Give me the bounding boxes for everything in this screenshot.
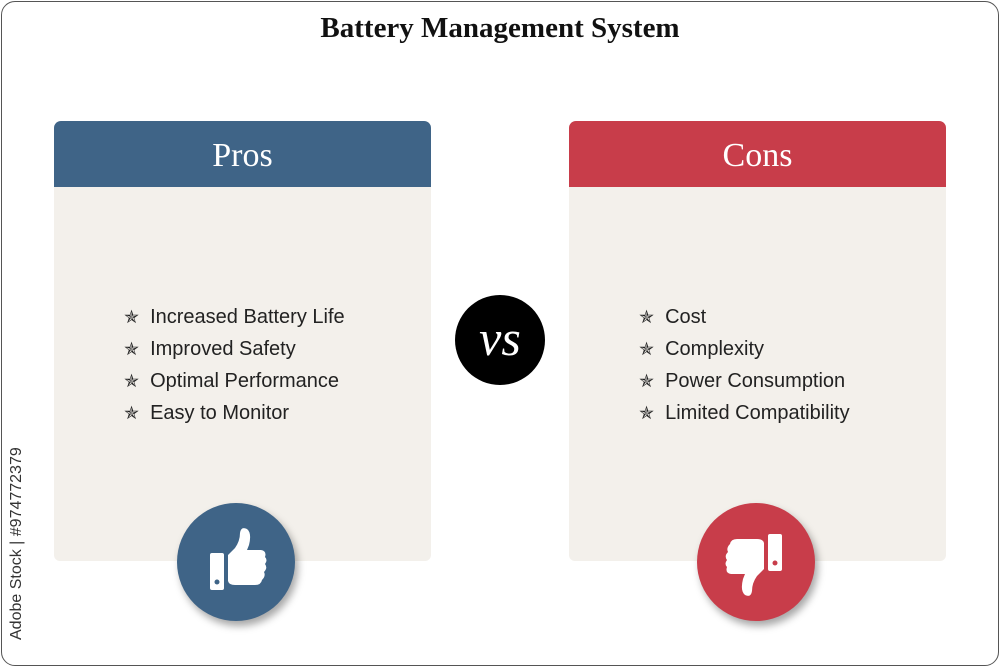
cons list: ✯ Cost	[639, 306, 706, 328]
panel: cons	[569, 121, 946, 631]
vs badge: vs	[479, 310, 521, 366]
cons list: ✯ Limited Compatibility	[639, 402, 850, 424]
pros list: ✯ Optimal Performance	[124, 370, 339, 392]
pros list: ✯ Improved Safety	[124, 338, 296, 360]
title: Battery Management System	[320, 12, 680, 44]
cons header	[569, 121, 946, 187]
cons header: Cons	[723, 137, 792, 174]
cons list: ✯ Complexity	[639, 338, 764, 360]
pros list: ✯ Increased Battery Life	[124, 306, 345, 328]
pros header	[54, 121, 431, 187]
pros list: ✯ Easy to Monitor	[124, 402, 289, 424]
pros header: Pros	[212, 137, 273, 174]
vs badge	[455, 295, 545, 385]
icon: thumbs down	[697, 503, 815, 621]
pros body	[54, 187, 431, 561]
icon: thumbs up	[177, 503, 295, 621]
pros list	[124, 306, 345, 424]
cons list: ✯ Power Consumption	[639, 370, 845, 392]
cons body	[569, 187, 946, 561]
cons list	[639, 306, 850, 424]
panel: pros	[54, 121, 431, 631]
watermark id: Adobe Stock | #974772379	[8, 447, 25, 640]
